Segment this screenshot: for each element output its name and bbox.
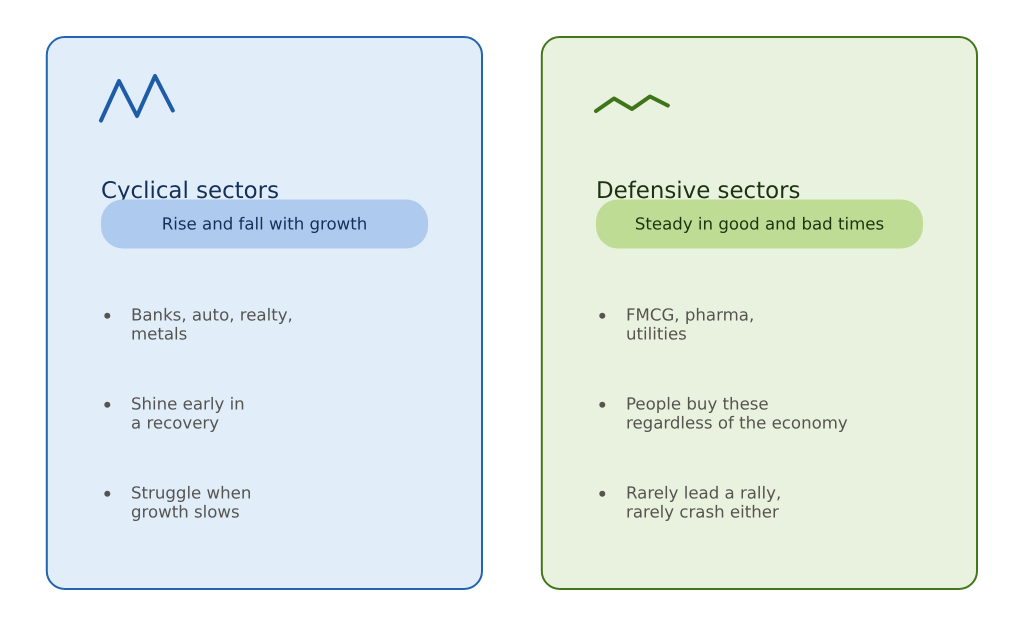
- bullet: FMCG, pharma, utilities: FMCG, pharma,: [626, 306, 754, 325]
- pill: steady in good and bad times: Steady in good and bad times: [635, 214, 884, 233]
- bullet: rarely lead a rally, rarely crash either: Rarely lead a rally,: [626, 484, 781, 502]
- icon: cyclical zigzag line: [101, 76, 173, 120]
- bullet: rarely lead a rally, rarely crash either: [599, 484, 781, 521]
- bullet: people buy these regardless of the economy: [599, 394, 848, 432]
- heading: defensive sectors: Defensive sectors: [596, 178, 800, 204]
- pill: rise and fall with growth: Rise and fall with growth: [162, 214, 367, 233]
- icon: defensive shallow wave line: [596, 96, 668, 111]
- heading: cyclical sectors: Cyclical sectors: [101, 178, 279, 204]
- bullet: banks, auto, realty, metals: metals: [131, 324, 187, 343]
- bullet: shine early in a recovery: [104, 394, 245, 432]
- bullet: rarely lead a rally, rarely crash either: rarely crash either: [626, 502, 779, 521]
- panel: defensive sectors: [542, 37, 977, 589]
- bullet: struggle when growth slows: growth slows: [131, 502, 240, 521]
- bullet: FMCG, pharma, utilities: [599, 306, 754, 343]
- bullet: banks, auto, realty, metals: Banks, auto, realty,: [131, 306, 293, 325]
- bullet: FMCG, pharma, utilities: utilities: [626, 324, 687, 343]
- panel: cyclical sectors: [47, 37, 482, 589]
- pill: steady in good and bad times: [596, 200, 923, 248]
- bullet: shine early in a recovery: a recovery: [131, 413, 219, 432]
- bullet: people buy these regardless of the economy: regardless of the economy: [626, 413, 848, 432]
- bullet: people buy these regardless of the economy: People buy these: [626, 394, 769, 414]
- bullet: banks, auto, realty, metals: [104, 306, 293, 343]
- bullet: struggle when growth slows: [104, 484, 251, 521]
- pill: rise and fall with growth: [101, 200, 428, 248]
- bullet: shine early in a recovery: Shine early in: [131, 394, 245, 414]
- bullet: struggle when growth slows: Struggle when: [131, 484, 251, 502]
